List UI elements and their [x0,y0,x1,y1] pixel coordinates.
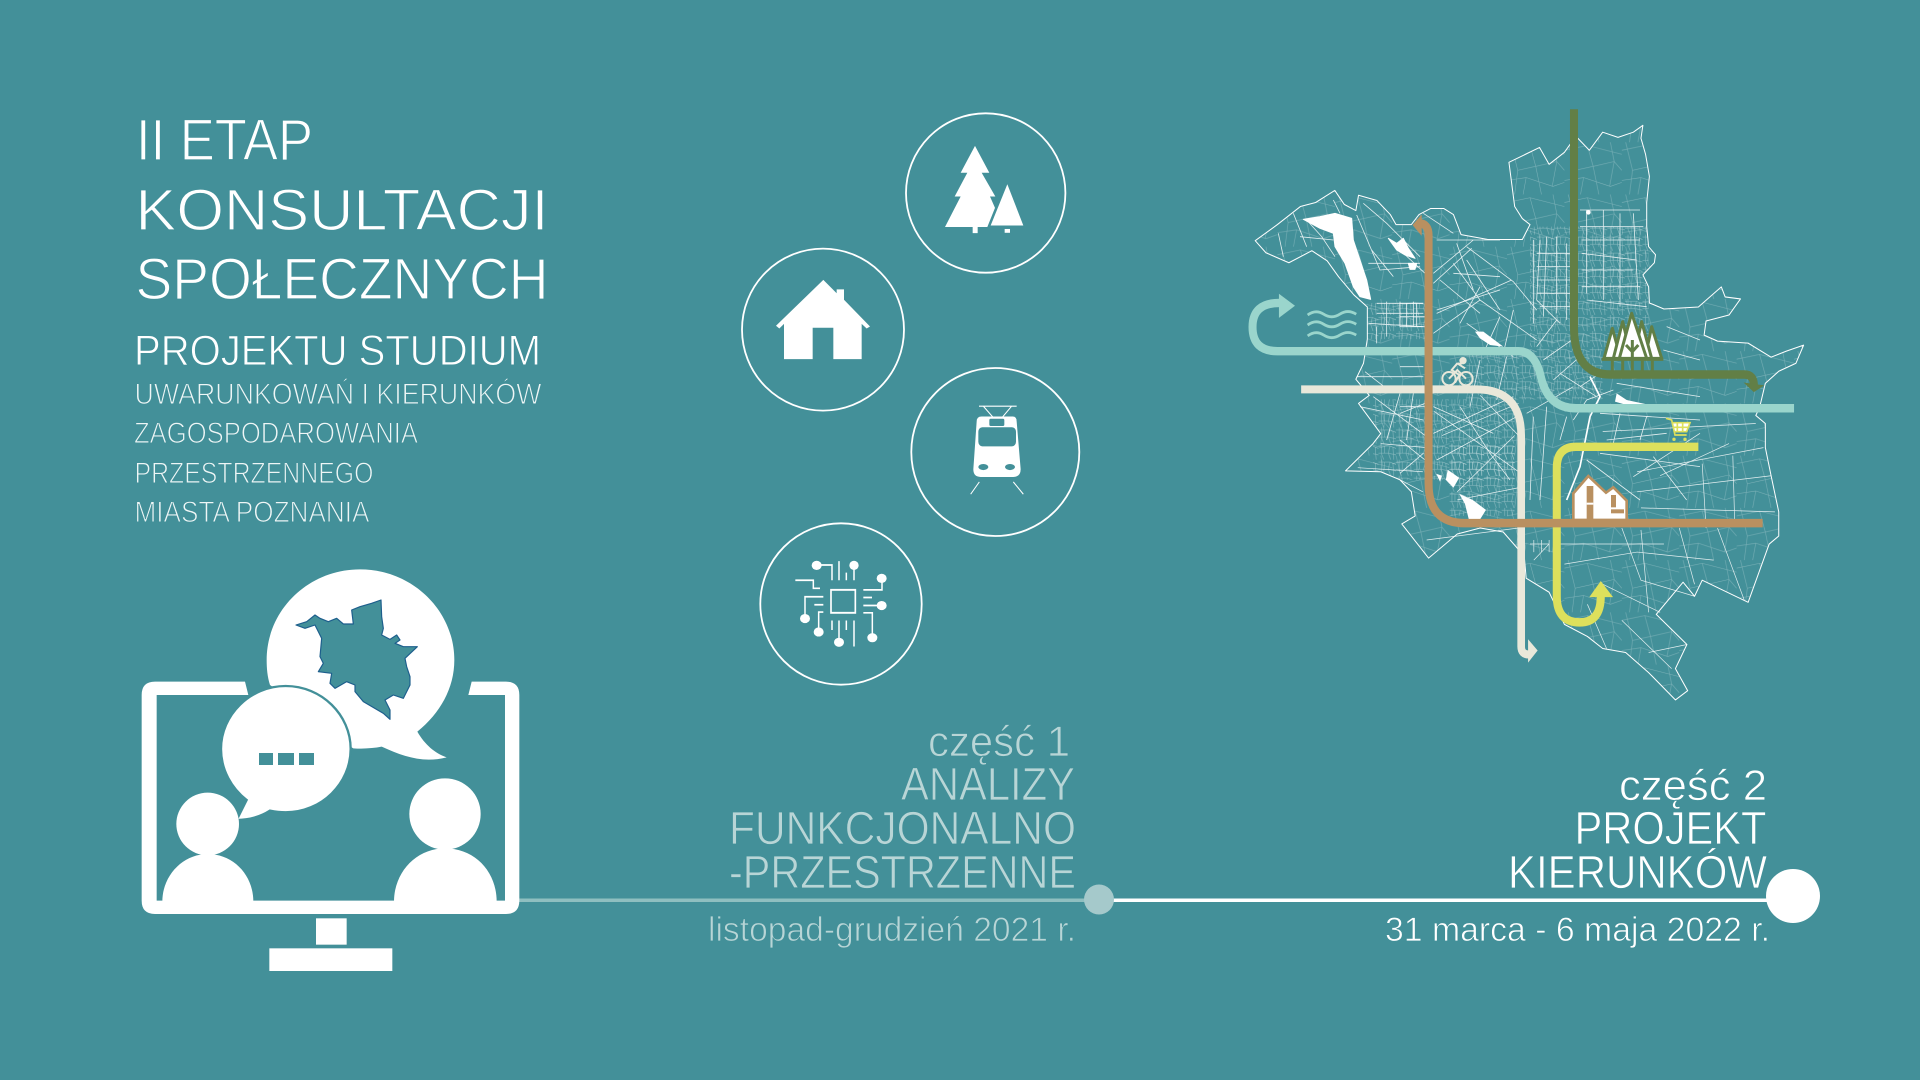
street texture and outline [1251,122,1809,705]
subtitle: ZAGOSPODAROWANIA [134,417,418,450]
streets: city centre [1400,210,1700,500]
text: część 1: -PRZESTRZENNE [729,846,1076,898]
trees [945,146,1023,233]
text: część 1: listopad-grudzień 2021 r. [708,911,1076,949]
route: beige [1301,389,1538,663]
text: część 2: 31 marca - 6 maja 2022 r. [1385,911,1770,949]
routes [1253,109,1794,663]
subtitle [134,378,542,529]
icon: waves [1308,312,1356,338]
tram [971,406,1023,494]
person left [162,793,253,902]
marker: part 2 [1766,869,1820,923]
title: II ETAP KONSULTACJI SPOŁECZNYCH: SPOŁECZNYCH [136,247,548,312]
subtitle: MIASTA POZNANIA [134,496,370,529]
map of Poznań in bubble [296,600,417,719]
circle [906,113,1065,273]
timeline [519,869,1820,923]
lakes: southern [1436,470,1486,519]
text: część 2: PROJEKT [1574,802,1766,854]
route: mint [1253,294,1794,408]
title: II ETAP KONSULTACJI SPOŁECZNYCH: II ETAP [136,108,313,173]
illustration: monitor with speech bubbles [142,569,519,971]
icon: trees [1602,313,1663,372]
title: II ETAP KONSULTACJI SPOŁECZNYCH: KONSULTACJI [136,178,548,243]
icon: house [742,249,904,411]
text: część 1: ANALIZY [901,758,1075,810]
icon: shopping cart [1666,418,1690,441]
text: część 2: KIERUNKÓW [1508,846,1768,898]
heading: projektu studium: PROJEKTU STUDIUM [134,327,541,375]
small speech bubble [221,686,351,820]
text: część 1: część 1 [928,718,1070,766]
lakes: western [1303,213,1417,299]
text: część 1: FUNKCJONALNO [729,802,1076,854]
route: dark green [1574,109,1764,392]
line: part 2 segment [1110,898,1780,902]
subtitle: UWARUNKOWAŃ I KIERUNKÓW [134,378,542,411]
text: część 2 [1385,762,1770,949]
lakes: central [1475,210,1650,406]
person right [394,778,497,902]
icon: tram [911,368,1079,536]
ellipsis squares [259,753,314,765]
icon: cyclist [1442,358,1473,385]
monitor frame [142,682,519,914]
line: part 1 segment [519,898,1094,902]
title block [134,108,548,529]
text: część 1 [708,718,1076,949]
large speech bubble [267,569,454,760]
icon: circuit chip [760,523,922,685]
circle [742,249,904,411]
subtitle: PRZESTRZENNEGO [134,457,374,490]
monitor stand [269,918,392,971]
house [776,280,870,359]
icon: forest [906,113,1065,273]
route: yellow [1557,447,1698,622]
text: część 2: część 2 [1619,762,1767,810]
circle [760,523,922,685]
marker: part 1 [1084,884,1114,914]
title: II ETAP KONSULTACJI SPOŁECZNYCH [136,108,548,312]
map: Poznań city with routes [1251,109,1809,705]
circle [911,368,1079,536]
icon: houses [1573,476,1627,520]
route: tan [1412,215,1763,523]
streets: western lobe [1278,200,1500,440]
chip [795,561,887,647]
